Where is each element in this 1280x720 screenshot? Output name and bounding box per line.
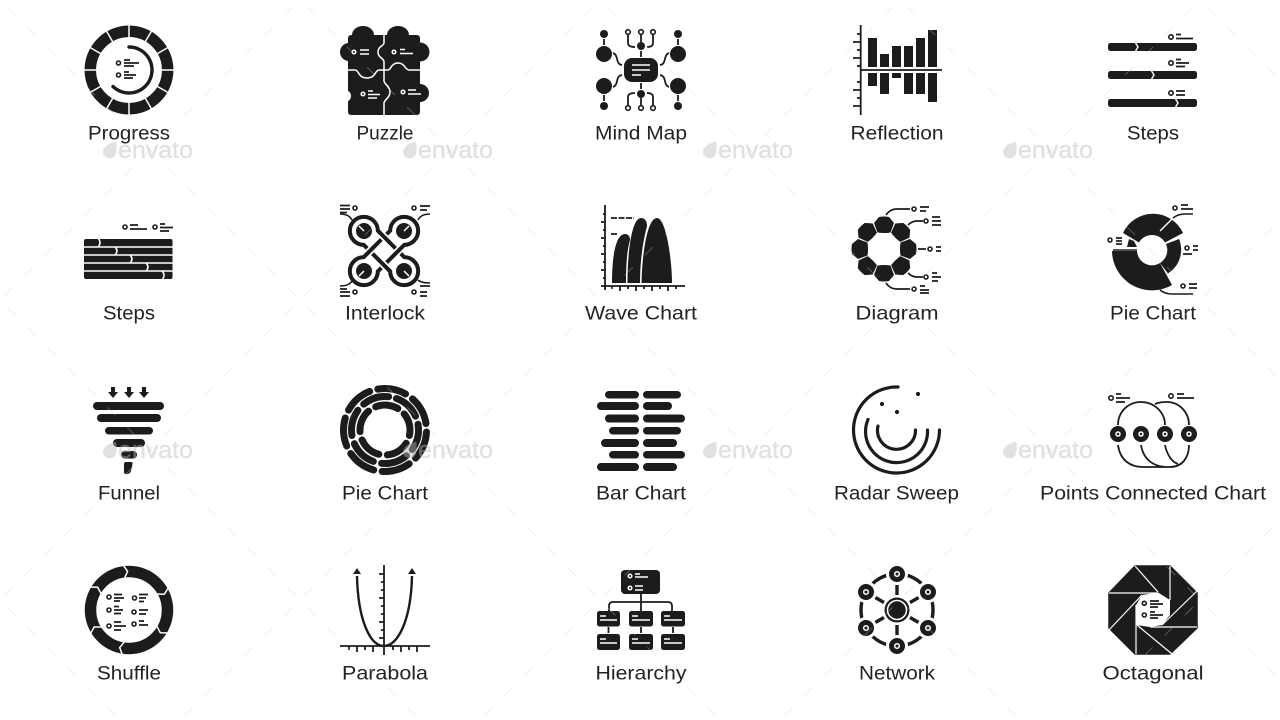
- label: Steps: [1127, 122, 1179, 144]
- watermark: row one: envato: [118, 137, 193, 164]
- cell: Wave Chart: [585, 205, 698, 324]
- label: Radar Sweep: [834, 482, 959, 504]
- cell: Puzzle: [339, 24, 431, 144]
- label: Reflection: [850, 122, 944, 144]
- watermark: row one: envato: [418, 137, 493, 164]
- cell: Progress: [83, 24, 175, 144]
- cell: Mind Map: [595, 30, 687, 145]
- icon: wave chart: [601, 205, 685, 291]
- label: Mind Map: [595, 122, 687, 144]
- cell: Steps (layers): [84, 224, 173, 324]
- label: Octagonal: [1102, 662, 1204, 684]
- icon: points connected chart: [1109, 394, 1197, 467]
- cell: Pie Chart (exploded): [1108, 205, 1198, 324]
- cell: Shuffle: [88, 564, 171, 684]
- icon: puzzle pieces: [339, 24, 431, 116]
- label: Interlock: [345, 302, 425, 324]
- icon: network hub: [855, 563, 939, 657]
- label: Shuffle: [97, 662, 161, 684]
- watermark: row three: envato: [718, 437, 793, 464]
- icon: reflection bar chart: [853, 25, 942, 115]
- watermark: row one: envato: [1018, 137, 1093, 164]
- icon: radar sweep arcs: [854, 387, 940, 473]
- icon: concentric ring segments: [337, 382, 433, 478]
- cell: Octagonal: [1102, 566, 1204, 684]
- cell: Pie Chart (rings): [337, 382, 433, 504]
- label: Progress: [88, 122, 170, 144]
- cell: Diagram: [852, 207, 941, 324]
- cell: Funnel: [93, 387, 164, 504]
- icon: three progress bars: [1108, 34, 1197, 108]
- icon: interlocked loops: [340, 206, 430, 296]
- label: Points Connected Chart: [1040, 482, 1267, 504]
- label: Steps: [103, 302, 155, 324]
- label: Parabola: [342, 662, 428, 684]
- watermark: row one: [103, 137, 1093, 164]
- watermark: row three: envato: [1018, 437, 1093, 464]
- label: Wave Chart: [585, 302, 698, 324]
- icon: butterfly bar chart: [597, 391, 685, 471]
- icon: stacked layers: [84, 224, 173, 280]
- icon: shuffle ring: [88, 564, 171, 656]
- cell: Points Connected Chart: [1040, 394, 1267, 504]
- cell: Radar Sweep: [834, 387, 959, 504]
- icon: parabola graph: [340, 565, 430, 655]
- icon: funnel: [93, 387, 164, 474]
- label: Funnel: [98, 482, 160, 504]
- watermark: row three: envato: [118, 437, 193, 464]
- icon: octagonal aperture: [1109, 566, 1197, 654]
- watermark: row one: envato: [718, 137, 793, 164]
- label: Pie Chart: [342, 482, 429, 504]
- icon: exploded pie chart: [1108, 205, 1198, 294]
- watermark: row three: [103, 437, 1093, 464]
- label: Pie Chart: [1110, 302, 1197, 324]
- icon: mind map: [596, 30, 686, 110]
- cell: Network: [855, 563, 939, 684]
- icon: petal ring diagram: [852, 207, 941, 293]
- label: Puzzle: [356, 122, 414, 144]
- icon: progress ring: [83, 24, 175, 116]
- cell: Hierarchy: [596, 570, 687, 684]
- label: Diagram: [856, 302, 938, 324]
- cell: Interlock: [340, 206, 430, 324]
- cell: Parabola: [340, 565, 430, 684]
- cell: Reflection: [850, 25, 944, 144]
- cell: Steps (bars): [1108, 34, 1197, 144]
- label: Hierarchy: [596, 662, 687, 684]
- label: Bar Chart: [596, 482, 687, 504]
- cell: Bar Chart: [596, 391, 687, 504]
- watermark: row three: envato: [418, 437, 493, 464]
- icon: hierarchy tree: [597, 570, 685, 650]
- label: Network: [859, 662, 935, 684]
